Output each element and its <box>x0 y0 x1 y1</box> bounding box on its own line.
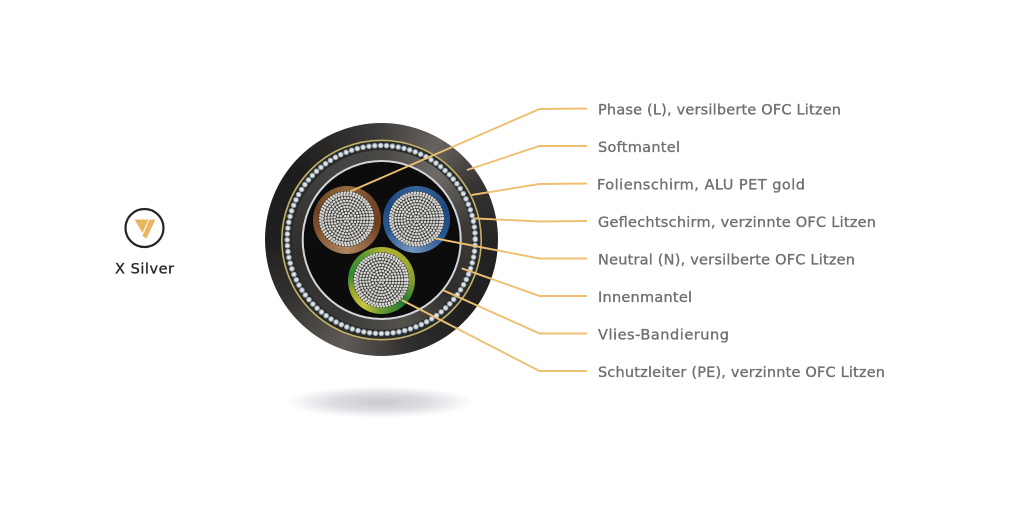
component labels: Innenmantel <box>598 290 692 306</box>
inner mantle <box>292 150 472 330</box>
dark bedding <box>281 140 482 340</box>
braid beads <box>287 146 475 334</box>
component labels: Schutzleiter (PE), verzinnte OFC Litzen <box>598 365 885 381</box>
strands: neutral <box>389 191 444 247</box>
strands: protective earth <box>354 252 409 308</box>
component labels: Folienschirm, ALU PET gold <box>597 178 805 194</box>
product name: X Silver <box>115 262 174 278</box>
component labels: Phase (L), versilberte OFC Litzen <box>598 102 841 118</box>
strands: phase <box>319 191 374 247</box>
conductor insulation: blue <box>383 186 450 252</box>
component labels: Vlies-Bandierung <box>598 328 729 344</box>
component labels: Geflechtschirm, verzinnte OFC Litzen <box>598 215 876 231</box>
outer sheath: Softmantel <box>265 123 498 356</box>
conductor insulation: green-yellow <box>348 246 415 314</box>
foil shield: gold ring <box>282 140 481 340</box>
component labels: Neutral (N), versilberte OFC Litzen <box>598 252 855 268</box>
conductor insulation: brown <box>312 186 380 254</box>
component labels: Softmantel <box>598 140 680 156</box>
